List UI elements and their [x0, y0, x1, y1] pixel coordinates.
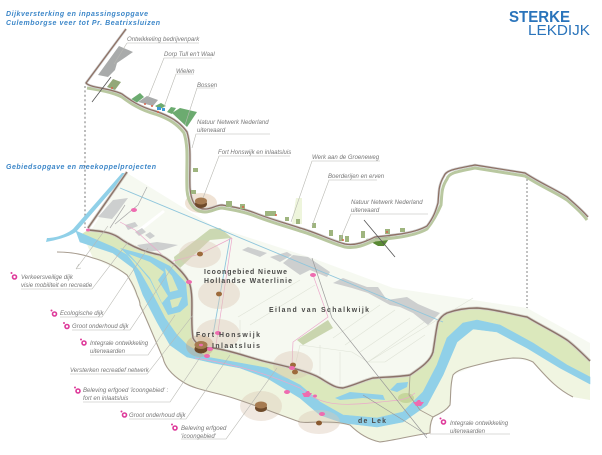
label: dorp tull: Dorp Tull en't Waal: [164, 52, 215, 58]
label: groot onderhoud 1: [63, 263, 175, 330]
map labels: Eiland van Schalkwijk: [269, 307, 369, 314]
map: lower area: [46, 172, 590, 442]
label: boerderijen: Boerderijen en erven: [328, 174, 385, 180]
lower labels: [10, 226, 510, 440]
land north of dike: [85, 173, 590, 442]
label: beleving 1: Beleving erfgoed 'icoongebied' :: [83, 388, 169, 394]
map labels: Inlaatsluis: [212, 343, 260, 350]
upper area fields: [98, 46, 391, 246]
upper labels: [114, 37, 428, 240]
icons: forts: [194, 252, 322, 425]
label: dorp tull: [148, 52, 215, 98]
land south of river: [85, 240, 590, 442]
label: beleving 1: fort en inlaatsluis: [83, 396, 128, 402]
logo: Sterke Lekdijk: STERKE: [509, 9, 570, 26]
label: integrale 1: [80, 315, 175, 355]
label: beleving 2: [171, 368, 277, 440]
lagoons: [120, 248, 188, 315]
crossing lines: [92, 77, 395, 257]
main river band: [76, 231, 590, 427]
map labels: de Lek: [358, 418, 386, 425]
label: fort honswijk: Fort Honswijk en inlaatsluis: [218, 150, 291, 156]
canal and routes: [110, 187, 443, 404]
label: beleving 2: 'icoongebied': [181, 434, 217, 440]
islands in river: [129, 254, 182, 308]
label: bossen: Bossen: [197, 83, 218, 89]
river head channel: [46, 173, 127, 242]
river: [46, 173, 590, 427]
label: beleving 2: Beleving erfgoed: [181, 426, 227, 432]
map labels: Icoongebied Nieuwe: [204, 269, 287, 276]
uiterwaard north of river: [80, 230, 590, 418]
parcel lines: [238, 280, 473, 385]
label: natuur netwerk: uiterwaard: [197, 128, 226, 134]
label: natuur 2: Natuur Netwerk Nederland: [351, 200, 423, 206]
label: versterken: [70, 315, 193, 374]
label: fort honswijk: [203, 150, 291, 198]
label: wielen: [164, 69, 195, 107]
long diagonal lines to Lek: [312, 258, 427, 438]
lakes: [335, 382, 408, 400]
label: groot onderhoud 2: [120, 355, 230, 419]
label: integrale 1: Integrale ontwikkeling: [90, 341, 149, 347]
farms along upper dike: [111, 87, 405, 242]
dike lower: [57, 172, 590, 442]
label: natuur 2: [340, 200, 428, 240]
icon: fort top: [195, 198, 207, 208]
icons: pink markers and ferries: [86, 208, 424, 416]
label: verkeersveilige dijk: visie mobiliteit en recreatie: [21, 283, 93, 289]
label: groot onderhoud 1: Groot onderhoud dijk: [72, 324, 129, 330]
label: groot onderhoud 2: Groot onderhoud dijk: [129, 413, 186, 419]
map: upper dike section: [86, 29, 588, 257]
label: natuur 2: uiterwaard: [351, 208, 380, 214]
label: wielen: Wielen: [176, 69, 195, 75]
label: bedrijvenpark: Ontwikkeling bedrijvenpark: [127, 37, 200, 43]
label: bossen: [185, 83, 218, 125]
label: verkeersveilige dijk: [10, 226, 128, 289]
field patches: [137, 210, 414, 403]
dashed connector lines: [85, 86, 527, 316]
label: versterken: Versterken recreatief netwerk: [70, 368, 150, 374]
map labels: Fort Honswijk: [196, 332, 260, 339]
heading: gebiedsopgave: Gebiedsopgave en meekoppelprojecten: [6, 164, 156, 171]
logo: Sterke Lekdijk: LEKDIJK: [528, 22, 590, 39]
label: groeneweg: [291, 155, 380, 222]
label: integrale 1: uiterwaarden: [90, 349, 126, 355]
label: groeneweg: Werk aan de Groeneweg: [312, 155, 380, 161]
label: ecologische dijk: Ecologische dijk: [60, 311, 104, 317]
label: beleving 1: [74, 353, 203, 402]
heading: dijkversterking: Dijkversterking en inpassingsopgave: [6, 11, 148, 18]
glow circles: [179, 240, 340, 434]
label: bedrijvenpark: [114, 37, 200, 64]
label: verkeersveilige dijk: Verkeersveilige dijk: [21, 275, 74, 281]
label: integrale 2: uiterwaarden: [450, 429, 486, 435]
label: boerderijen: [312, 174, 385, 226]
heading: dijkversterking: [6, 11, 160, 27]
label: ecologische dijk: [50, 248, 148, 317]
label: natuur netwerk: [192, 120, 270, 148]
map labels: Hollandse Waterlinie: [204, 278, 292, 285]
label: natuur netwerk: Natuur Netwerk Nederland: [197, 120, 269, 126]
upper dike glow: [185, 193, 217, 213]
buildings strip: [98, 198, 440, 325]
logo: Sterke Lekdijk: [509, 9, 590, 39]
map labels: [196, 269, 386, 425]
label: integrale 2: [430, 418, 510, 435]
label: integrale 2: Integrale ontwikkeling: [450, 421, 509, 427]
upper dike line: [86, 29, 588, 248]
heading: dijkversterking: Culemborgse veer tot Pr. Beatrixsluizen: [6, 20, 160, 27]
